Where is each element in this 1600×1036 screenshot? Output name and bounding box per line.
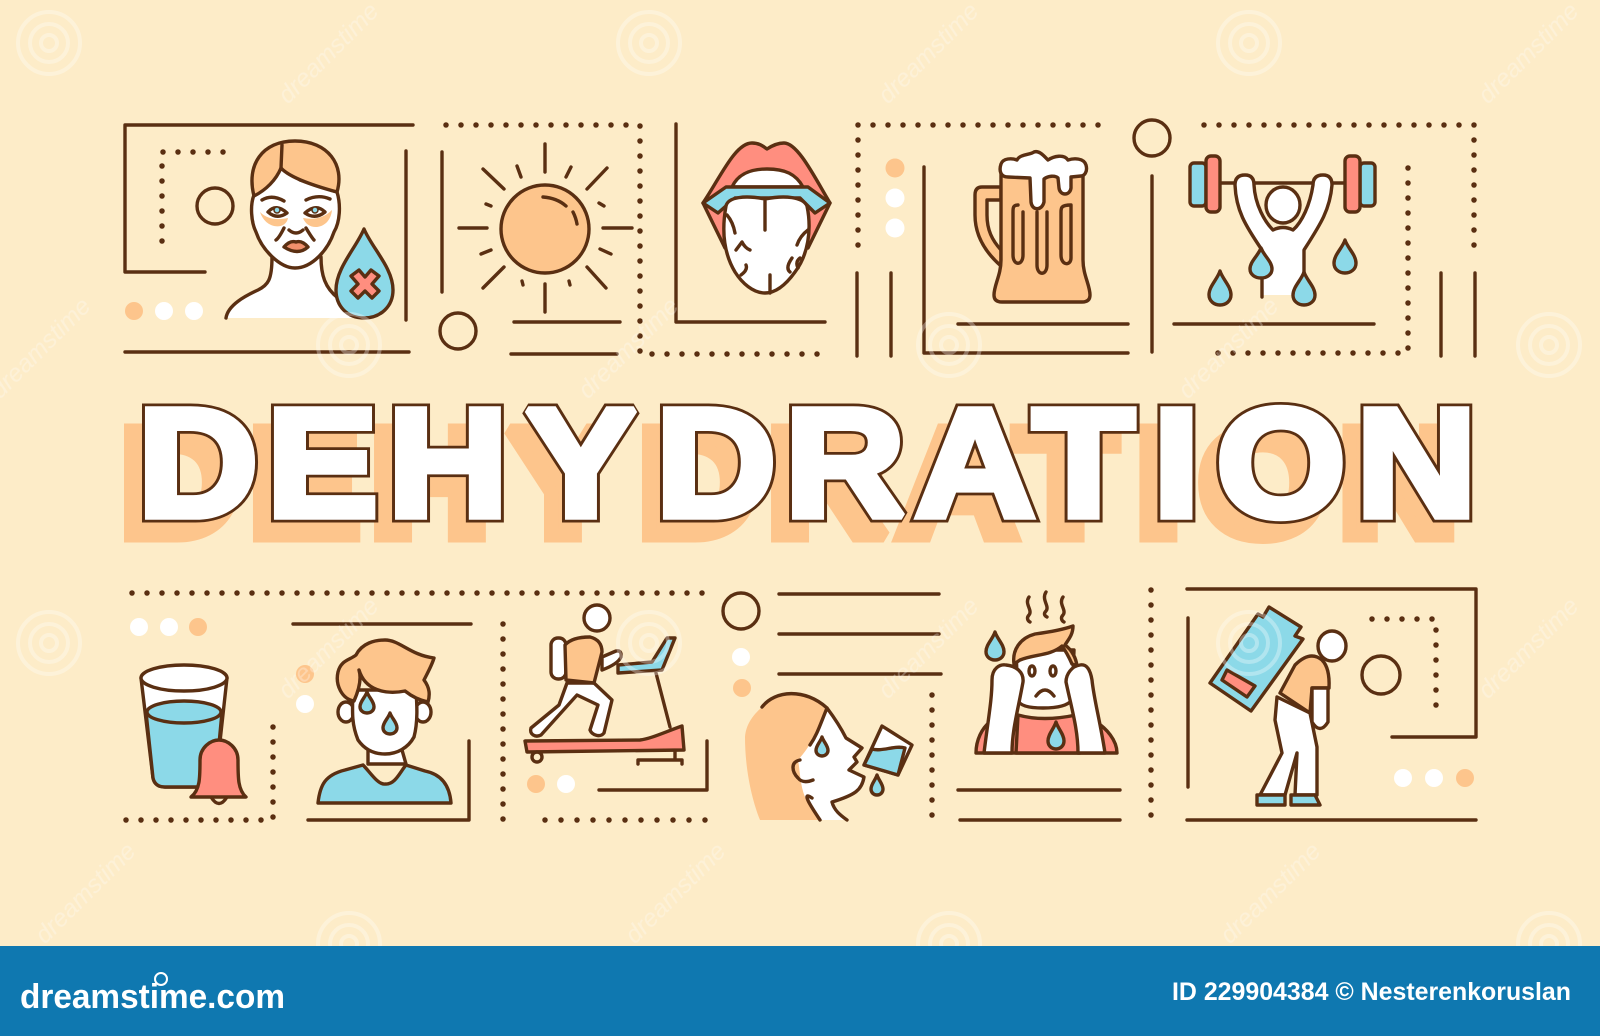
icon: mouth with dry tongue — [703, 143, 830, 293]
panel: treadmill runner — [525, 605, 707, 820]
watermark text: dreamstime — [872, 592, 985, 704]
panel: aged dehydrated face — [125, 125, 413, 352]
panel: beer — [857, 125, 1128, 356]
icon: woman drinking from a glass — [745, 694, 912, 820]
panel: water glass reminder — [125, 593, 705, 820]
watermark text: dreamstime — [1472, 592, 1585, 704]
icon: sweating weightlifter — [1190, 156, 1375, 305]
footer logo: dreamstime.com: dreamstime.com — [20, 978, 285, 1016]
panel: dry tongue — [676, 124, 830, 322]
watermark text: dreamstime — [1172, 292, 1285, 404]
panel: woman drinking water — [723, 593, 1120, 821]
title: DEHYDRATION with shadow and outline: DEHYDRATION — [120, 397, 1458, 569]
panel: stressed man — [976, 592, 1117, 753]
icon: runner on treadmill — [525, 605, 684, 764]
watermark text: dreamstime — [572, 292, 685, 404]
watermark text: dreamstime — [1214, 837, 1327, 949]
panel: weightlifter — [1134, 120, 1475, 356]
watermark text: dreamstime — [619, 837, 732, 949]
icon: wrinkled face with water drop — [226, 141, 393, 318]
panel: sun heat — [440, 125, 831, 354]
watermark text: dreamstime — [1472, 0, 1585, 109]
icon: beer mug — [975, 152, 1090, 302]
watermark text: dreamstime — [29, 837, 142, 949]
icon: sun — [459, 144, 632, 312]
title: DEHYDRATION with shadow and outline: DEHYDRATION — [138, 377, 1476, 549]
watermark text: dreamstime — [272, 0, 385, 109]
footer credit: image id and author: ID 229904384 © Nesterenkoruslan — [1172, 978, 1571, 1006]
panel: sweating boy — [293, 624, 503, 821]
watermark text: dreamstime — [872, 0, 985, 109]
icon: boy with sweat drops — [318, 640, 451, 803]
footer band — [0, 946, 1600, 1036]
watermark text: dreamstime — [272, 592, 385, 704]
icon: overheated stressed man — [976, 592, 1117, 753]
title: DEHYDRATION with shadow and outline: DEHYDRATION — [138, 377, 1476, 549]
panel: low battery fatigue — [1151, 589, 1476, 821]
icon: tired man carrying empty battery — [1210, 607, 1346, 805]
icon: glass of water with bell — [141, 665, 246, 804]
